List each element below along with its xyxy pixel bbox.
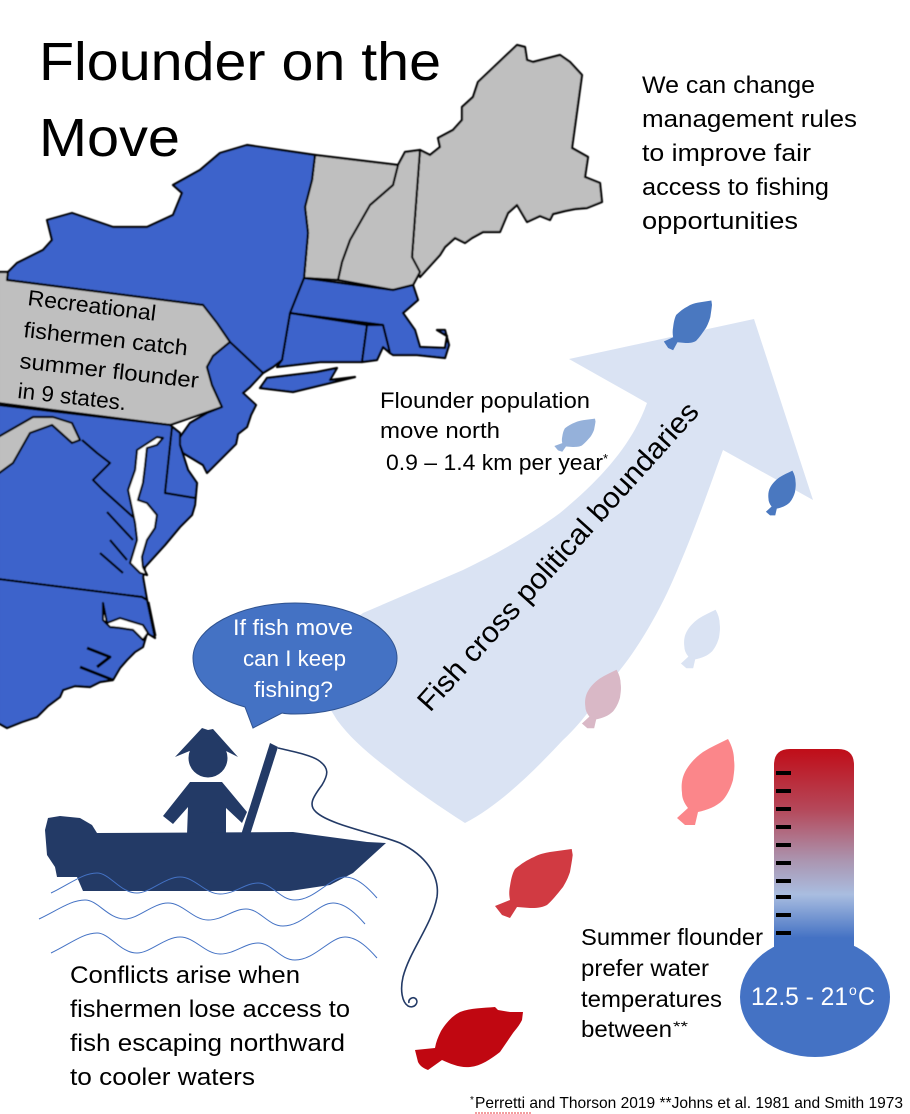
state: Connecticut	[277, 313, 367, 367]
fish: red	[495, 849, 573, 918]
text: population movement rate: Flounder population	[380, 388, 590, 413]
state: Long Island	[260, 368, 355, 392]
text: recreational fishermen in 9 states: Recreational	[26, 285, 157, 326]
text: population movement rate	[380, 388, 608, 475]
waves	[39, 873, 377, 960]
text: preferred temperatures: **	[673, 1018, 689, 1034]
text: population movement rate: *	[603, 451, 608, 466]
text: management rules: opportunities	[642, 208, 798, 235]
title: Move	[39, 108, 180, 168]
feature: Virginia rivers	[82, 440, 133, 573]
speech bubble: can I keep	[243, 646, 346, 671]
text: management rules: to improve fair	[642, 140, 811, 167]
boat hull	[45, 816, 386, 891]
border: Delaware	[165, 427, 195, 498]
thermometer tube	[774, 749, 854, 950]
fish: salmon	[677, 739, 734, 825]
body	[163, 782, 247, 835]
text: conflicts	[70, 962, 350, 1091]
icon: fisherman in boat	[45, 728, 386, 891]
text: preferred temperatures: Summer flounder	[581, 924, 763, 950]
hat	[175, 728, 238, 757]
state: West Virginia	[0, 417, 80, 474]
thermometer bulb	[740, 937, 890, 1057]
thermometer	[740, 749, 890, 1057]
feature: Chesapeake Bay	[128, 437, 163, 575]
text: recreational fishermen in 9 states: fishermen catch	[22, 317, 189, 360]
fish: dark blue right	[766, 471, 796, 515]
speech bubble: If fish move	[233, 615, 353, 640]
text: recreational fishermen in 9 states: in 9 states.	[16, 378, 128, 415]
arrow label: Fish cross political boundaries	[411, 396, 706, 718]
fish: dark blue top	[664, 301, 712, 350]
arrow: northward migration	[300, 319, 813, 823]
state: New York	[7, 145, 315, 373]
text: population movement rate: 0.9 – 1.4 km per year	[386, 450, 603, 475]
title: Flounder on the	[39, 32, 441, 92]
temperature label: o	[849, 982, 857, 998]
state: Pennsylvania	[0, 272, 230, 425]
fish: dark red	[415, 1007, 523, 1070]
text: management rules: We can change	[642, 72, 815, 99]
title	[39, 32, 441, 168]
footnote: Perretti and Thorson 2019 **Johns et al. 1981 and Smith 1973	[475, 1095, 903, 1112]
speech bubble: fishing?	[254, 677, 333, 702]
text: preferred temperatures: between	[581, 1016, 672, 1042]
text: management rules: management rules	[642, 106, 857, 133]
head	[188, 738, 228, 778]
state: Maryland, Virginia and Delaware	[0, 405, 197, 600]
text: management rules	[642, 72, 857, 235]
text: management rules: access to fishing	[642, 174, 829, 201]
text: preferred temperatures	[581, 924, 763, 1042]
text: preferred temperatures: temperatures	[581, 986, 722, 1012]
state: Rhode Island	[362, 325, 390, 362]
fishing line	[278, 748, 437, 1007]
text: conflicts: fish escaping northward	[70, 1030, 345, 1057]
state: Massachusetts	[290, 278, 449, 358]
temperature label: 12.5 - 21	[751, 983, 848, 1011]
state: New Jersey	[178, 342, 263, 473]
state: New Hampshire	[338, 150, 420, 290]
fishing rod	[241, 743, 278, 835]
feature: Carolina inlets	[80, 602, 155, 680]
state: Vermont	[304, 155, 398, 280]
state: Maine	[412, 45, 602, 277]
fish: light blue	[554, 419, 596, 452]
footnote: *	[470, 1095, 474, 1106]
text: conflicts: fishermen lose access to	[70, 996, 350, 1023]
text: population movement rate: move north	[380, 418, 500, 443]
text: conflicts: to cooler waters	[70, 1064, 255, 1091]
text: conflicts: Conflicts arise when	[70, 962, 300, 989]
temperature label: C	[858, 983, 875, 1011]
speech bubble	[193, 603, 397, 728]
text: recreational fishermen in 9 states	[16, 285, 200, 415]
fish: pale pink	[582, 670, 621, 728]
text: recreational fishermen in 9 states: summer flounder	[18, 348, 200, 393]
feature: Pamlico Sound	[103, 603, 148, 640]
text: preferred temperatures: prefer water	[581, 955, 709, 981]
thermometer ticks	[776, 771, 791, 935]
map: northeast US states	[0, 45, 602, 728]
fish: pale blue	[681, 610, 720, 668]
state: North Carolina	[0, 579, 155, 728]
